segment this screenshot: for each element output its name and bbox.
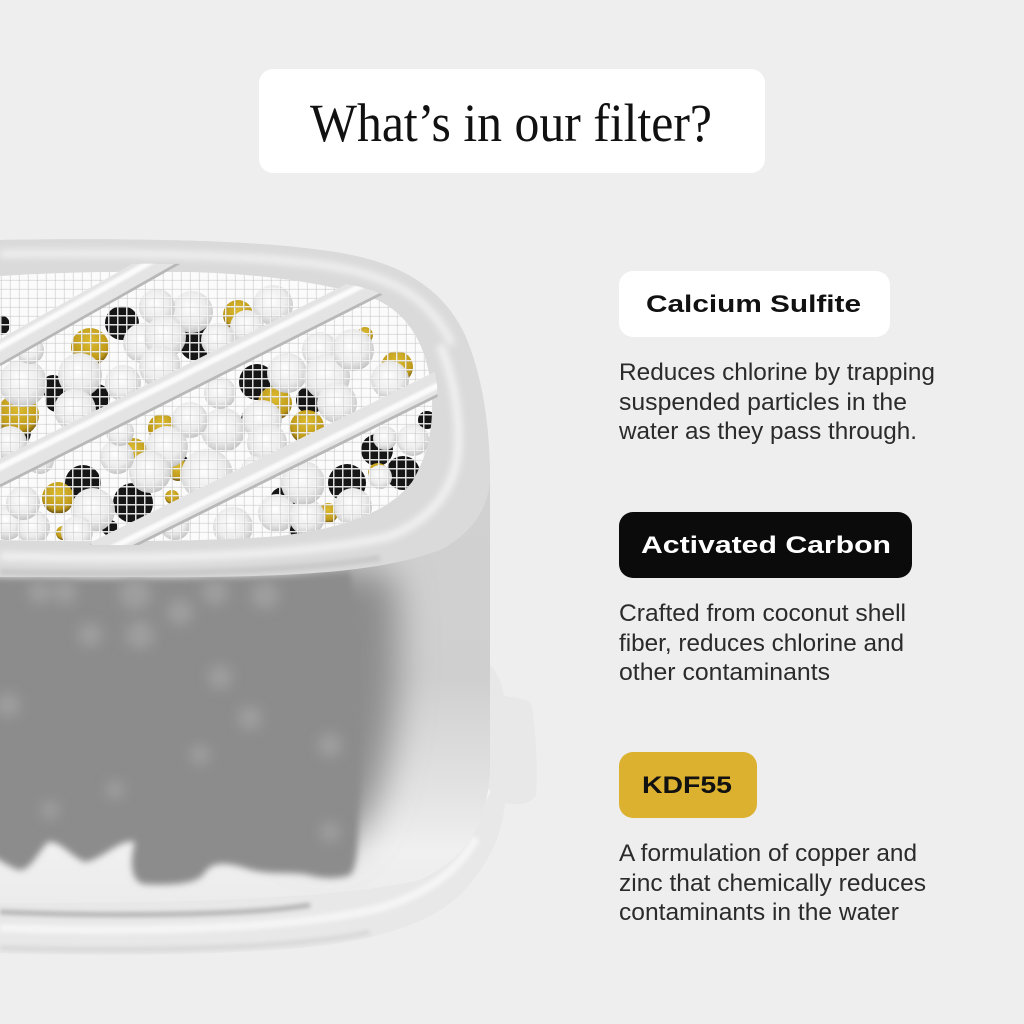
description: water as they pass through.	[618, 418, 917, 445]
blurred bead highlights	[0, 578, 342, 842]
wire mesh	[0, 265, 440, 545]
label: Activated Carbon: Activated Carbon	[641, 532, 891, 559]
lower flange and side tab	[0, 665, 537, 954]
panel: KDF55	[619, 752, 926, 926]
title	[259, 69, 765, 173]
mesh window with beads	[0, 265, 440, 548]
description: zinc that chemically reduces	[619, 870, 926, 897]
description: A formulation of copper and	[619, 840, 917, 867]
description: suspended particles in the	[619, 389, 907, 416]
description: other contaminants	[619, 659, 830, 686]
diagonal ribs	[0, 264, 438, 546]
description: Reduces chlorine by trapping	[619, 359, 935, 386]
description	[619, 840, 926, 926]
filter cartridge illustration	[0, 239, 537, 954]
label: KDF55: KDF55	[642, 772, 732, 799]
panel: calcium sulfite	[618, 271, 935, 445]
top rim of the cup	[0, 239, 490, 577]
label: Activated Carbon	[619, 512, 912, 578]
cup body	[0, 239, 490, 903]
panel: activated carbon	[619, 512, 912, 686]
title: What’s in our filter?	[310, 93, 712, 153]
description: Crafted from coconut shell	[619, 600, 906, 627]
black carbon beads	[0, 306, 436, 540]
dark media seen through frosted wall	[0, 569, 398, 885]
label: Calcium Sulfite: Calcium Sulfite	[646, 291, 861, 318]
yellow KDF beads	[0, 300, 413, 540]
label: Calcium Sulfite	[619, 271, 890, 337]
description	[619, 600, 906, 686]
white calcium sulfite beads	[0, 285, 429, 548]
label: KDF55	[619, 752, 757, 818]
description: contaminants in the water	[619, 899, 899, 926]
description	[618, 359, 935, 445]
infographic canvas	[0, 69, 934, 954]
description: fiber, reduces chlorine and	[619, 630, 904, 657]
